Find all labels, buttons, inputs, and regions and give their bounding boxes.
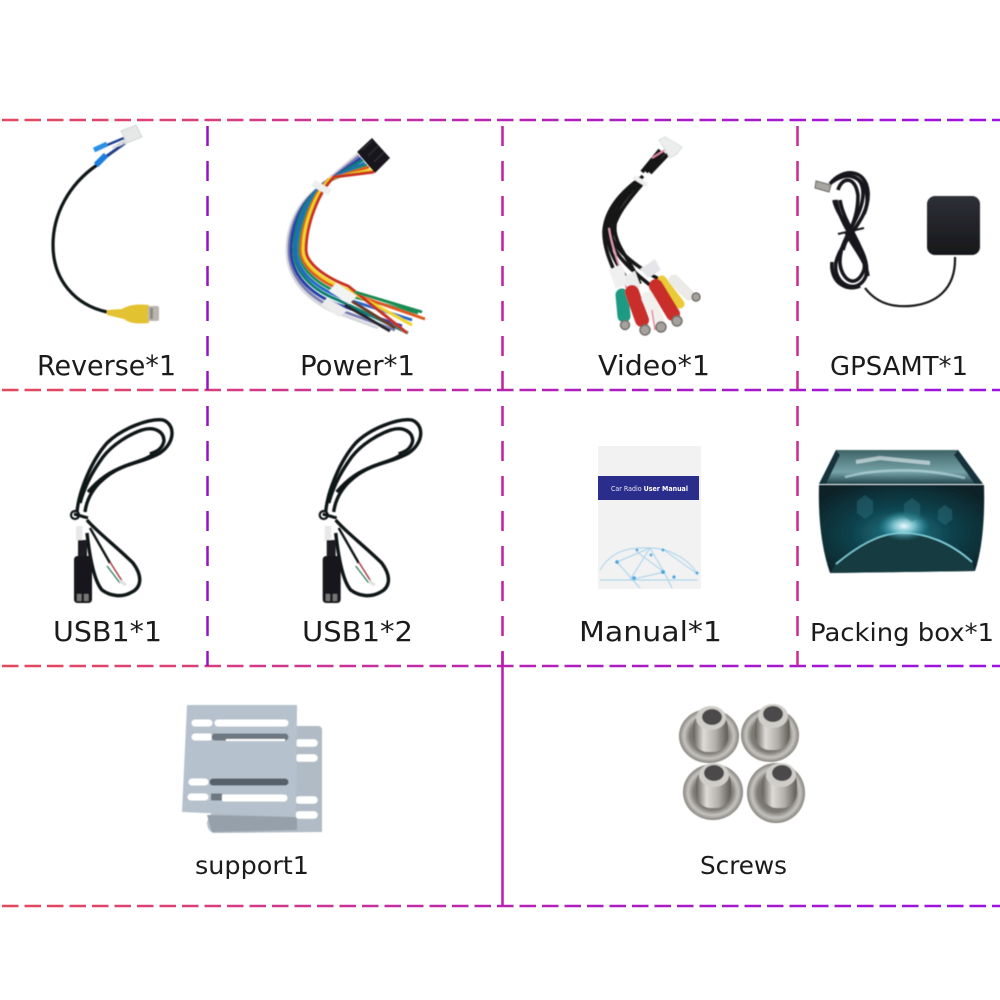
icon: manual booklet <box>598 446 701 589</box>
icon: metal bracket <box>182 705 322 833</box>
icon: four screws <box>679 704 805 823</box>
icon: packing box <box>819 450 984 573</box>
panel: power harness <box>287 138 425 382</box>
panel: packing box <box>810 450 994 647</box>
icon: power harness <box>287 138 425 333</box>
icon: USB cable <box>71 420 172 603</box>
panel: support bracket <box>182 705 322 880</box>
icon: manual booklet: Car Radio User Manual <box>611 485 688 493</box>
label: Power*1: Power*1 <box>300 349 415 382</box>
icon: reverse cable <box>53 125 159 324</box>
label: support1: support1 <box>195 851 309 880</box>
label: USB1*1: USB1*1 <box>53 615 162 648</box>
icon: GPS antenna <box>815 173 980 306</box>
panel: reverse cable <box>37 125 176 382</box>
label: Packing box*1: Packing box*1 <box>810 618 994 647</box>
label: GPSAMT*1: GPSAMT*1 <box>830 352 968 382</box>
panel: video cable <box>598 137 710 382</box>
panel: GPS antenna <box>815 173 980 382</box>
label: Video*1: Video*1 <box>598 349 710 382</box>
panel: USB cable one <box>53 420 172 648</box>
icon: video cable <box>604 137 700 335</box>
grid lines <box>2 120 1000 906</box>
label: USB1*2: USB1*2 <box>302 615 413 648</box>
panel: screws <box>679 704 805 880</box>
panel: USB cable two <box>302 420 421 648</box>
label: Screws: Screws <box>700 851 787 880</box>
panel: manual <box>579 446 722 648</box>
label: Reverse*1: Reverse*1 <box>37 349 176 382</box>
label: Manual*1: Manual*1 <box>579 615 722 648</box>
icon: USB cable <box>320 420 421 603</box>
